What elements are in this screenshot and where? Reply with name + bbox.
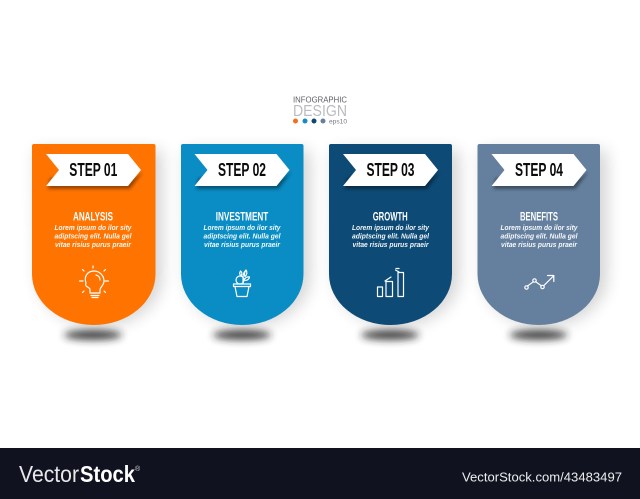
footer logo: VectorStock xyxy=(19,461,141,487)
text: description: vitae risius purus praeir xyxy=(501,240,578,249)
icon: growth bars xyxy=(378,268,404,296)
text: description xyxy=(54,223,132,249)
ribbon: step 01 xyxy=(46,154,141,186)
panel: step 1 analysis xyxy=(32,144,162,340)
logo: infographic design: INFOGRAPHIC xyxy=(293,94,347,104)
footer bar xyxy=(0,448,640,499)
text: description: adiptscing elit. Nulla gel xyxy=(54,232,132,240)
ribbon: step 04: STEP 04 xyxy=(515,160,563,180)
logo: infographic design: eps10 xyxy=(329,118,347,126)
icon: trend line arrow xyxy=(525,276,554,289)
text: description: Lorem ipsum do ilor sity xyxy=(500,223,578,232)
ribbon: step 03 xyxy=(343,154,438,186)
text: description: Lorem ipsum do ilor sity xyxy=(352,223,430,232)
text: description: vitae risius purus praeir xyxy=(352,240,430,249)
icon: plant pot with coin xyxy=(234,270,250,296)
icon: light bulb xyxy=(80,266,108,298)
footer logo: VectorStock: Vector xyxy=(19,461,79,487)
footer url: VectorStock.com/43483497 xyxy=(462,470,622,484)
text: description xyxy=(352,223,430,249)
text: description xyxy=(204,223,281,249)
heading: growth: GROWTH xyxy=(373,210,408,224)
heading: benefits: BENEFITS xyxy=(520,210,558,224)
footer logo: VectorStock: ® xyxy=(135,465,141,473)
logo: infographic design: DESIGN xyxy=(293,103,347,120)
ribbon: step 02: STEP 02 xyxy=(218,160,266,180)
panel: step 3 growth xyxy=(329,144,459,340)
ribbon: step 03: STEP 03 xyxy=(366,160,414,180)
logo: infographic design xyxy=(293,94,347,126)
text: description: vitae risius purus praeir xyxy=(55,240,132,249)
ribbon: step 02 xyxy=(194,154,290,186)
heading: analysis: ANALYSIS xyxy=(73,210,113,224)
text: description: Lorem ipsum do ilor sity xyxy=(54,223,132,232)
text: description: vitae risius purus praeir xyxy=(204,240,281,249)
text: description: Lorem ipsum do ilor sity xyxy=(204,223,281,232)
text: description: adiptscing elit. Nulla gel xyxy=(204,232,281,240)
ribbon: step 01: STEP 01 xyxy=(69,160,117,180)
text: description: adiptscing elit. Nulla gel xyxy=(500,232,578,240)
panel: step 4 benefits xyxy=(478,144,607,340)
footer logo: VectorStock: Stock xyxy=(80,461,135,487)
heading: investment: INVESTMENT xyxy=(216,210,269,224)
ribbon: step 04 xyxy=(492,154,586,186)
text: description xyxy=(500,223,578,249)
panel: step 2 investment xyxy=(181,144,310,340)
text: description: adiptscing elit. Nulla gel xyxy=(352,232,430,240)
